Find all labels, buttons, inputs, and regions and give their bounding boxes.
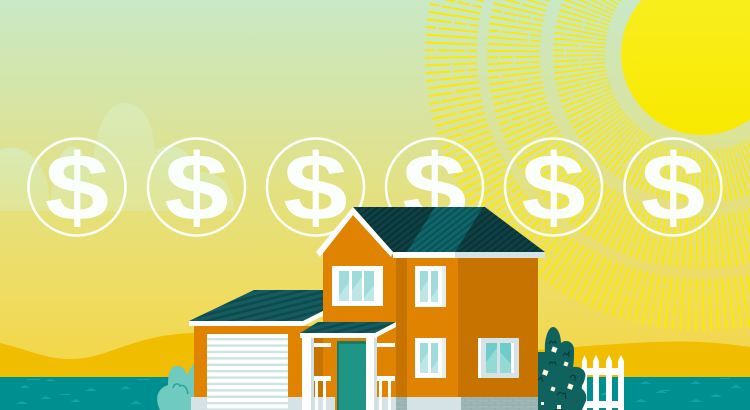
upper gable window bbox=[332, 266, 383, 306]
dollar coin 3: $ bbox=[283, 135, 348, 241]
left hill bbox=[0, 333, 194, 378]
dollar coin 5: $ bbox=[521, 135, 586, 241]
dollar coin 2: $ bbox=[164, 135, 229, 241]
gable trim bbox=[316, 207, 393, 257]
sun rays bbox=[451, 0, 750, 305]
garage roof bbox=[189, 290, 323, 321]
garage base bbox=[191, 397, 303, 410]
garage door bbox=[207, 334, 288, 410]
porch base bbox=[314, 397, 396, 410]
porch railings bbox=[314, 343, 395, 410]
dollar coin 6: $ bbox=[641, 135, 705, 241]
dollar coin 6 bbox=[624, 135, 722, 241]
picket fence bbox=[581, 355, 624, 410]
right dark bush bbox=[538, 327, 586, 410]
bush curls bbox=[538, 341, 575, 399]
garage fascia bbox=[189, 311, 323, 326]
eave trim bbox=[393, 252, 455, 258]
dollar coin 3 bbox=[267, 135, 364, 241]
dollar coin 1: $ bbox=[45, 135, 109, 241]
house bbox=[189, 207, 545, 410]
dollar coin 1 bbox=[28, 135, 126, 241]
porch roof bbox=[300, 322, 396, 333]
garage wall bbox=[194, 326, 324, 410]
foundation bbox=[396, 397, 541, 410]
porch columns bbox=[302, 338, 377, 410]
upper side window bbox=[415, 266, 446, 307]
gable wall bbox=[323, 215, 396, 410]
left teal bush bbox=[157, 362, 195, 410]
shaded corner strip bbox=[396, 255, 407, 410]
dollar coin 2 bbox=[148, 135, 245, 241]
dollar coin 5 bbox=[505, 135, 602, 241]
right hill bbox=[535, 342, 750, 378]
bush flowers bbox=[541, 346, 574, 409]
front wall bbox=[407, 255, 458, 410]
water bbox=[0, 377, 750, 410]
pale background bushes bbox=[0, 103, 234, 211]
eave trim shaded bbox=[455, 252, 545, 258]
dollar coin 4 bbox=[386, 135, 483, 241]
teal cross gable roof bbox=[407, 207, 483, 252]
porch shadow wall bbox=[314, 338, 323, 410]
front door bbox=[337, 341, 366, 410]
dollar coin 4: $ bbox=[402, 135, 467, 241]
side wall shaded bbox=[458, 255, 538, 410]
porch fascia bbox=[300, 322, 396, 338]
main roof bbox=[353, 207, 545, 252]
right window bbox=[478, 338, 519, 378]
lower side window bbox=[415, 338, 446, 378]
sun bbox=[621, 0, 750, 135]
